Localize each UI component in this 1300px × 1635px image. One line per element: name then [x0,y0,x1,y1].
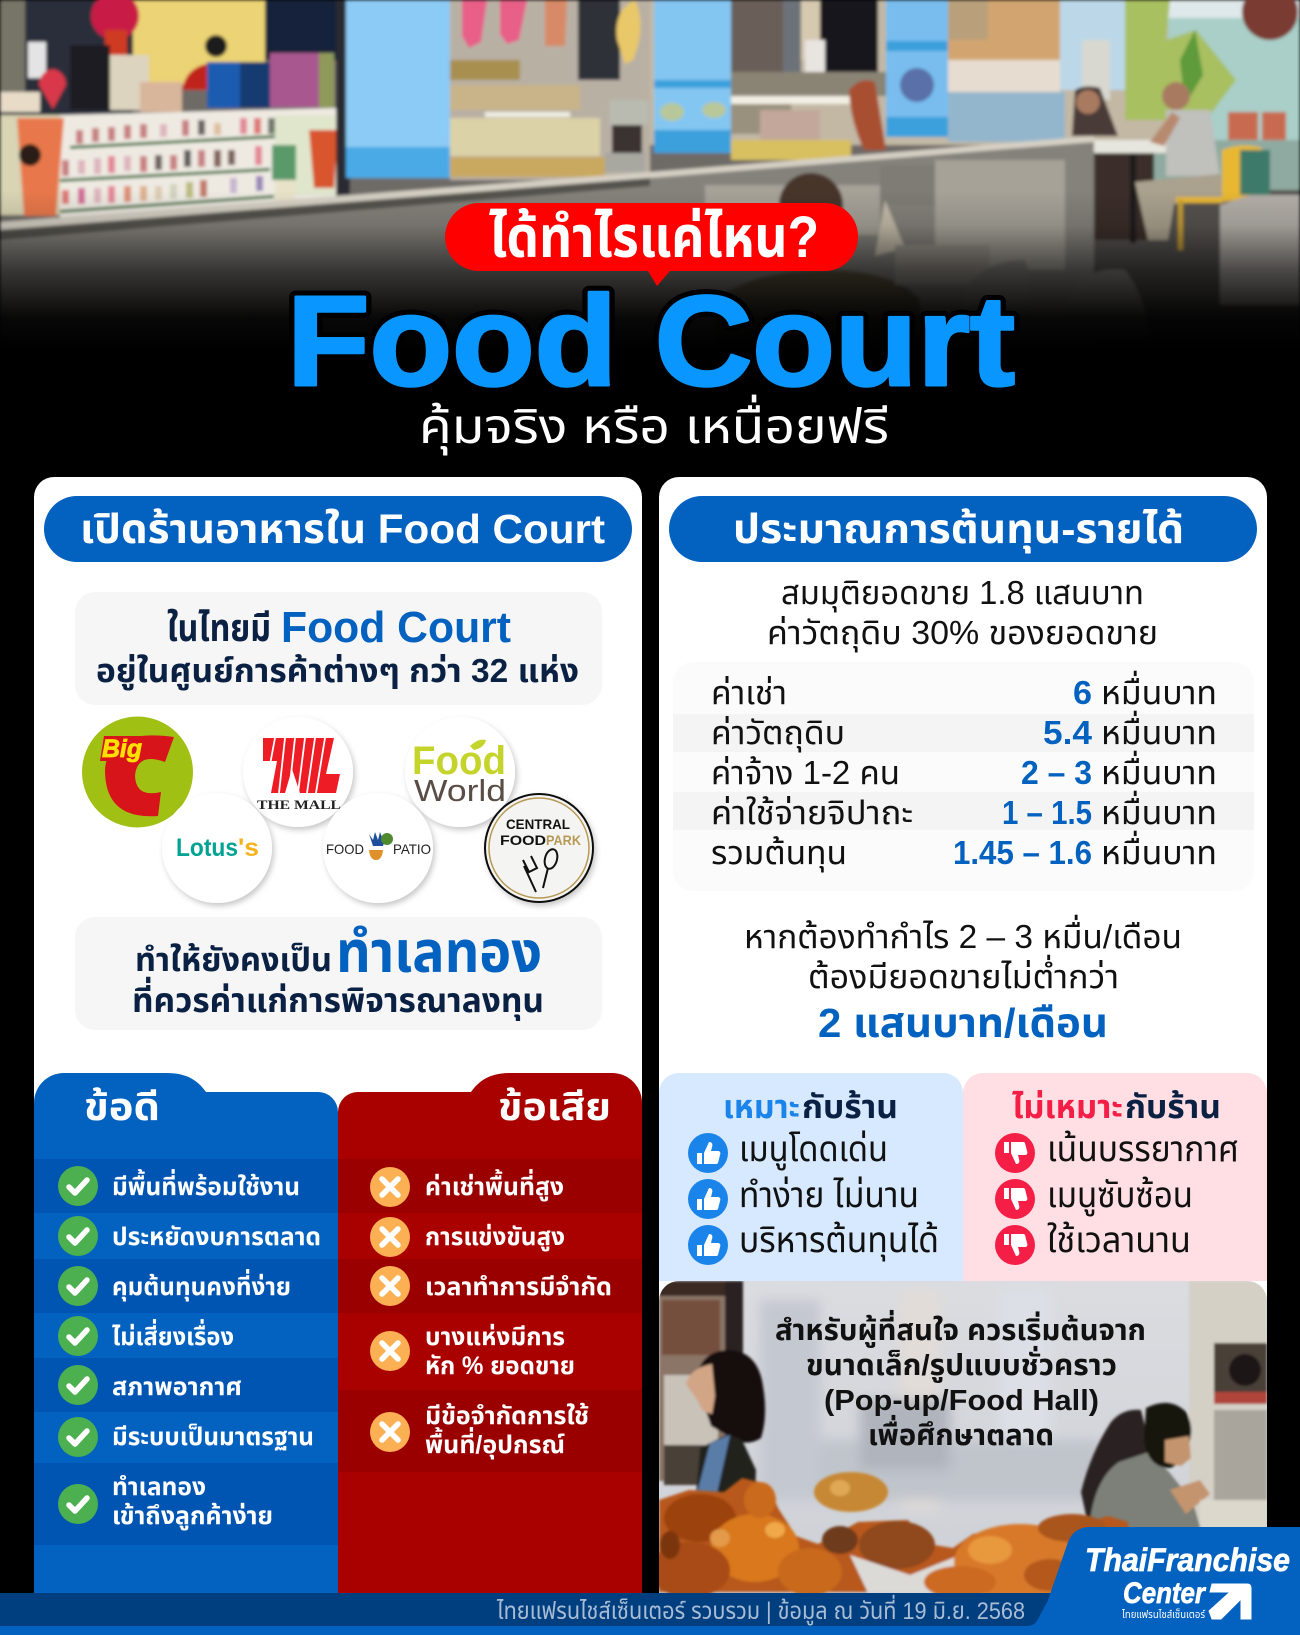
heading: กับร้าน [1125,1088,1221,1125]
pros list: มีพื้นที่พร้อมใช้งาน [112,1169,300,1201]
shelf [60,108,336,222]
row: rent: หมื่นบาท [1101,670,1217,711]
cons list: เวลาทำการมีจำกัด [425,1273,612,1301]
heading [723,1088,898,1125]
logo: Food Patio: FOOD [326,841,364,857]
recommendation text: เพื่อศึกษาตลาด [868,1414,1054,1452]
hero dark gradient [0,190,1300,350]
speech bubble: headline question: ได้ทำไรแค่ไหน? [489,205,819,270]
not suitable list: ใช้เวลานาน [1047,1219,1191,1260]
row: total cost: หมื่นบาท [1101,830,1217,871]
logo: The Mall [243,717,353,827]
callout: prime location: ทำให้ยังคงเป็น [135,941,332,978]
row: rent: 6 [1073,674,1092,711]
counter [0,140,1096,280]
not suitable list [1047,1128,1239,1260]
recommendation text: (Pop-up/Food Hall) [824,1385,1099,1417]
left heading pill: เปิดร้านอาหารใน Food Court [80,506,605,552]
logo: Food World [405,717,515,827]
row: wages: 2 – 3 [1021,754,1092,791]
logo: Food Patio [323,793,433,903]
pros list: คุมต้นทุนคงที่ง่าย [112,1269,291,1302]
recommendation text [775,1309,1146,1452]
row: raw materials: ค่าวัตถุดิบ [711,714,845,753]
heading: ข้อดี [84,1087,160,1129]
assumption text: สมมุติยอดขาย 1.8 แสนบาท [781,574,1144,613]
logo: Central Food Park: FOOD [500,832,546,848]
row stripes [34,1159,338,1545]
assumption text: ค่าวัตถุดิบ 30% ของยอดขาย [767,614,1158,653]
cross icons [370,1167,410,1452]
logo: Central Food Park [485,794,593,902]
profit target text [744,914,1182,1046]
screens [342,0,453,150]
pros list: ไม่เสี่ยงเรื่อง [112,1319,234,1351]
row: wages: ค่าจ้าง 1-2 คน [711,754,900,791]
footer bar: ไทยแฟรนไชส์เซ็นเตอร์ รวบรวม | ข้อมูล ณ วันที่ 19 มิ.ย. 2568 [496,1594,1025,1626]
callout: number of food courts [75,592,602,705]
pros list [112,1169,321,1531]
profit target text: ต้องมียอดขายไม่ต่ำกว่า [808,954,1119,995]
logo: Central Food Park: PARK [546,832,581,848]
row: miscellaneous [711,790,1217,831]
panel: left background [34,477,642,1593]
check icons [58,1166,98,1524]
row: wages: หมื่นบาท [1101,750,1217,791]
heading: ไม่เหมาะ [1012,1088,1123,1125]
hero photo: food court stalls [0,0,1300,350]
callout: number of food courts: อยู่ในศูนย์การค้าต่างๆ กว่า 32 แห่ง [96,652,579,691]
thumbs up icons [688,1133,728,1265]
cons list: มีข้อจำกัดการใช้ [425,1402,589,1430]
cons list: การแข่งขันสูง [425,1223,565,1252]
cons list: ค่าเช่าพื้นที่สูง [425,1169,564,1202]
right wall and man [1081,1281,1267,1530]
row: miscellaneous: 1 – 1.5 [1002,794,1092,831]
logo: Lotus's: 's [238,834,259,862]
panel: pros [34,1073,338,1593]
suitable list [739,1128,939,1261]
row: raw materials: หมื่นบาท [1101,710,1217,751]
row: rent: ค่าเช่า [711,674,787,711]
pros list: เข้าถึงลูกค้าง่าย [112,1502,273,1531]
brand arrow [1209,1584,1251,1619]
left heading pill [44,496,632,562]
logo: Lotus's [162,793,272,903]
logo: Food World: Food [412,739,506,783]
not suitable list: เน้นบรรยากาศ [1047,1128,1239,1169]
recommendation text: สำหรับผู้ที่สนใจ ควรเริ่มต้นจาก [775,1309,1146,1348]
suitable list: บริหารต้นทุนได้ [739,1219,939,1261]
profit target text: 2 แสนบาท/เดือน [818,1000,1108,1046]
assumption text [767,574,1158,653]
pros list: ประหยัดงบการตลาด [112,1223,321,1251]
panel: recommendation photo [650,1281,1267,1600]
main title: Food Court [287,270,1015,413]
row: miscellaneous: หมื่นบาท [1101,790,1217,831]
profit target text: หากต้องทำกำไร 2 – 3 หมื่น/เดือน [744,914,1182,955]
seating [1094,190,1300,281]
callout: prime location: ที่ควรค่าแก่การพิจารณาลงทุน [132,976,544,1021]
row: rent [711,670,1217,711]
recommendation text: ขนาดเล็ก/รูปแบบชั่วคราว [806,1345,1117,1383]
logo: Food World: World [414,773,506,808]
panel: not suitable for [963,1073,1267,1281]
brand logo: ThaiFranchise Center: ไทยแฟรนไชส์เซ็นเตอร์ [1121,1609,1205,1621]
row: miscellaneous: ค่าใช้จ่ายจิปาถะ [711,794,913,831]
row: total cost: 1.45 – 1.6 [953,834,1092,871]
heading: เหมาะ [723,1088,800,1125]
thumbs down icons [995,1133,1035,1265]
row: wages [711,750,1217,791]
main title: Food Court [287,270,1015,413]
suitable list: ทำง่าย ไม่นาน [739,1174,919,1215]
logo: Food Patio: PATIO [393,841,431,857]
row stripes [338,1159,642,1472]
callout: prime location: ทำเลทอง [336,920,542,985]
brand logo: ThaiFranchise Center: ThaiFranchise [1085,1542,1290,1578]
row: total cost [711,830,1217,873]
callout: prime location [75,917,602,1030]
footer bar [0,1593,1300,1635]
suitable list: เมนูโดดเด่น [739,1128,888,1170]
cons list [425,1169,612,1460]
photo background [659,1281,1267,1593]
speech bubble: headline question [445,203,858,286]
row: total cost: รวมต้นทุน [711,834,847,873]
subtitle: คุ้มจริง หรือ เหนื่อยฟรี [419,394,889,456]
panel: suitable for [659,1073,963,1281]
pros list: ทำเลทอง [112,1473,206,1501]
stall centre [336,0,350,195]
heading [1012,1088,1221,1125]
callout: number of food courts: Food Court [281,603,511,652]
cons list: หัก % ยอดขาย [425,1352,575,1380]
brand logo: ThaiFranchise Center [1048,1527,1300,1635]
pros list: สภาพอากาศ [112,1373,242,1401]
logo group [82,716,593,903]
fried chicken [650,1472,1133,1600]
cost table [673,662,1254,891]
brand logo: ThaiFranchise Center: Center [1123,1577,1207,1610]
right heading pill: ประมาณการต้นทุน-รายได้ [733,506,1184,554]
not suitable list: เมนูซับซ้อน [1047,1174,1193,1216]
pros list: มีระบบเป็นมาตรฐาน [112,1423,314,1451]
panel: right background [659,477,1267,1593]
right stalls [648,0,1170,148]
callout: number of food courts: ในไทยมี [167,608,271,650]
foreground diner [777,172,845,209]
heading: กับร้าน [802,1088,898,1125]
heading: ข้อเสีย [498,1087,611,1129]
logo: The Mall: THE MALL [257,797,341,812]
logo: Big C [82,716,193,828]
logo: Lotus's: Lotus [176,834,238,862]
logo: Central Food Park: CENTRAL [506,816,570,832]
logo: Big C: Big [102,735,142,763]
right heading pill [669,496,1257,562]
row: raw materials [711,710,1217,753]
cons list: บางแห่งมีการ [425,1323,565,1351]
panel: cons [338,1073,642,1593]
left stall and woman [659,1281,765,1520]
cons list: พื้นที่/อุปกรณ์ [425,1427,565,1460]
row: raw materials: 5.4 [1043,714,1093,751]
